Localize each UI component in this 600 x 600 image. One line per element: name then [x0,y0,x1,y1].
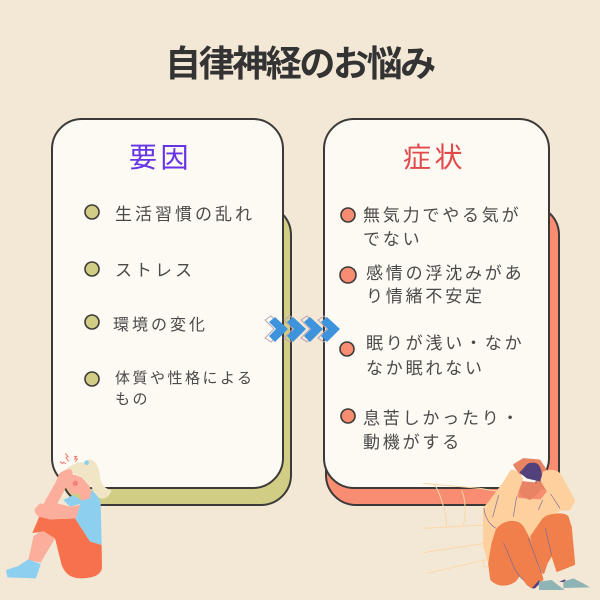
heading: symptoms: 症状 [403,142,466,173]
item: lifestyle: 生活習慣の乱れ [115,205,255,224]
item: sleep [340,334,524,378]
item: mood swings: り情緒不安定 [366,287,485,306]
item: environment [85,315,208,334]
item: breathing [341,409,521,452]
item: lethargy: 無気力でやる気が [363,206,521,225]
clothing fold lines [484,494,560,580]
hair tie [84,460,89,465]
lower leg [28,531,55,563]
hands [514,459,550,490]
panel shadow: causes [62,205,291,505]
item: breathing: 息苦しかったり・ [363,409,521,428]
ponytail [86,460,112,499]
item: constitution: もの [115,391,150,408]
arrows: chevrons [265,316,340,342]
item: stress: ストレス [115,261,195,280]
item: breathing: 動機がする [363,433,462,452]
panel: causes [52,119,291,505]
hair [521,464,541,481]
shoe left [539,580,565,590]
item: constitution [85,369,255,408]
hair [63,462,91,487]
web lines [423,483,500,573]
heading: causes: 要因 [129,142,192,173]
right arm [539,471,574,509]
cheek [73,481,78,486]
item: environment: 環境の変化 [113,316,208,334]
torso [484,492,558,562]
shirt [63,490,102,545]
item: lethargy: でない [363,230,422,249]
right leg [531,515,574,573]
item: sleep: なか眠れない [366,359,485,378]
panel card: causes [52,119,283,488]
item: lethargy [341,206,521,249]
left leg [489,522,542,587]
shoe [6,559,41,578]
face [518,481,543,500]
panel shadow: symptoms [326,205,559,505]
shorts [32,515,102,578]
stress marks [60,453,77,464]
shoe right [563,578,590,588]
panel: symptoms [324,119,559,505]
illustration: man holding head [423,459,590,590]
item: mood swings [340,264,524,306]
socks [532,579,567,588]
illustration: woman holding head [6,453,112,578]
left arm [486,471,522,524]
panel card: symptoms [324,119,549,488]
item: constitution: 体質や性格による [115,369,255,387]
arm [35,469,80,519]
neck and face [66,474,92,502]
title: 自律神経のお悩み [165,43,435,84]
item: sleep: 眠りが浅い・なか [366,334,524,353]
item: mood swings: 感情の浮沈みがあ [366,264,524,283]
